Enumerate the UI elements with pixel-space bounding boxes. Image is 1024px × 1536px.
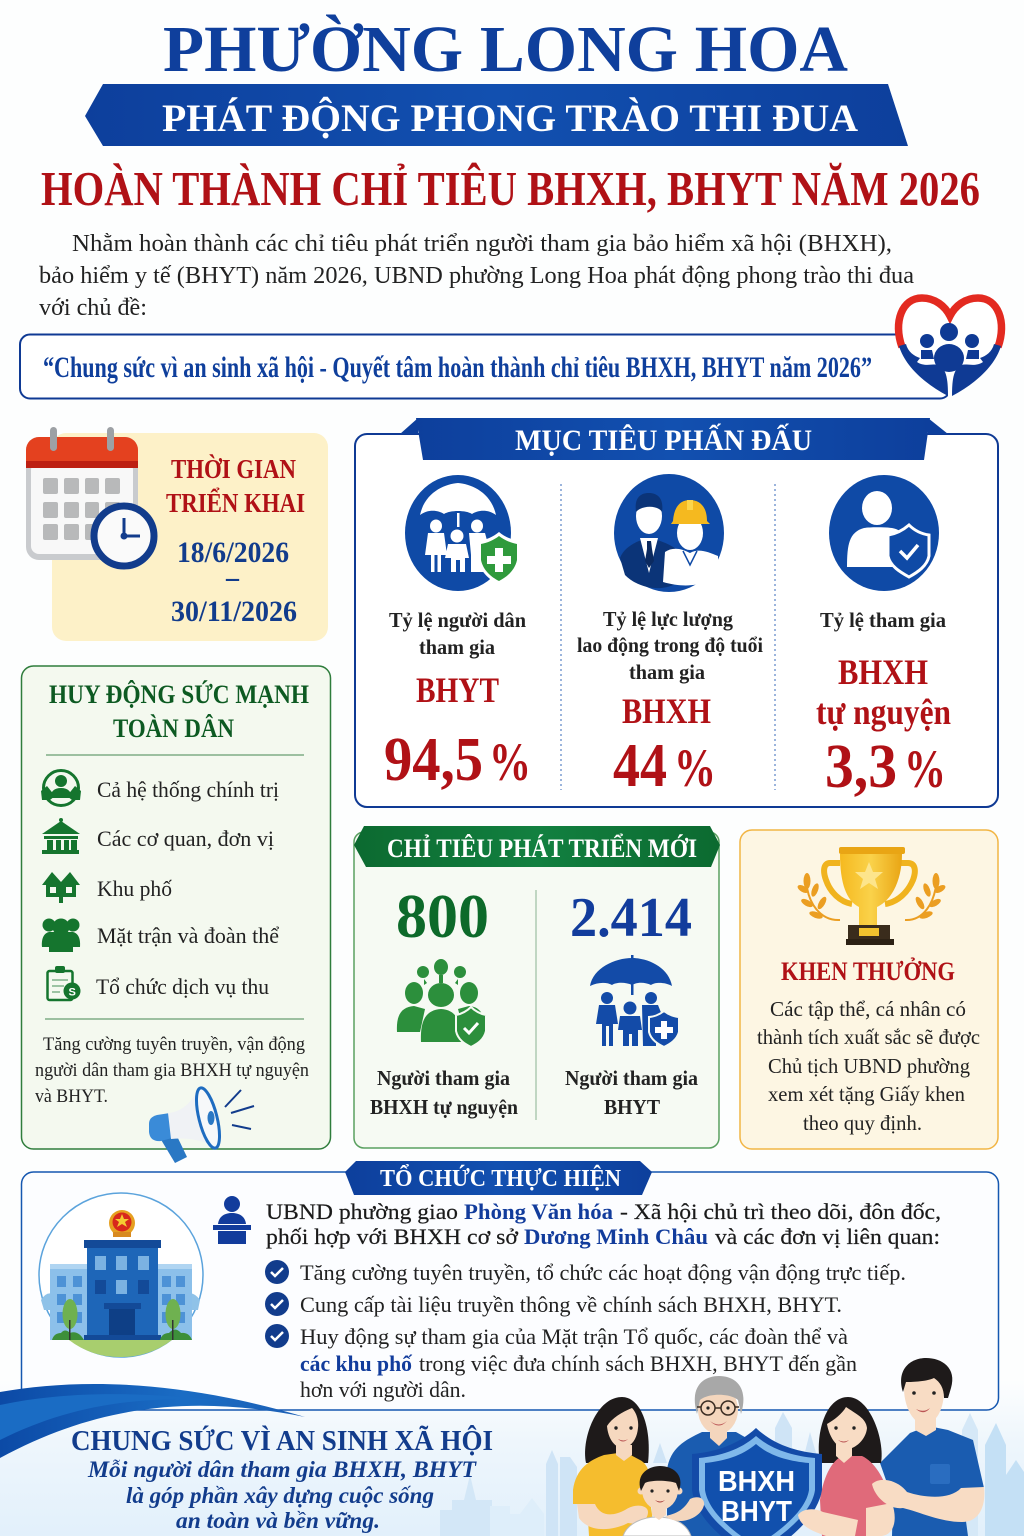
number: 2.414: 2.414: [570, 887, 692, 949]
number: 3,3%: [825, 733, 946, 801]
icon: office worker and engineer: [614, 474, 724, 592]
man's arm on shoulder: [872, 1480, 984, 1522]
text block: khen thưởng: Chủ tịch UBND phường: [768, 1054, 970, 1078]
panel: huy động sức mạnh toàn dân: [22, 666, 330, 1163]
heading: thời gian triển khai: THỜI GIAN: [171, 454, 296, 484]
list of tasks: [265, 1260, 906, 1402]
ribbon: mục tiêu phấn đấu: [400, 418, 948, 460]
panel: chỉ tiêu phát triển mới: [354, 826, 720, 1148]
heading: BHXH tự nguyện: BHXH: [838, 652, 928, 692]
panel: mục tiêu phấn đấu: [355, 418, 998, 807]
label: BHXH tự nguyện: [370, 1095, 518, 1119]
icon: blue family under umbrella: [590, 955, 679, 1047]
icon: heart with hands and people: [896, 294, 1005, 397]
icon: person with check shield: [829, 475, 939, 591]
ribbon: mục tiêu phấn đấu: MỤC TIÊU PHẤN ĐẤU: [515, 423, 812, 457]
text block: khen thưởng: xem xét tặng Giấy khen: [768, 1082, 965, 1106]
ribbon: chỉ tiêu phát triển mới: CHỈ TIÊU PHÁT TRIỂN MỚI: [387, 834, 697, 863]
text block: phân công: UBND phường giao: [266, 1199, 458, 1224]
text block: tuyên truyền: và BHYT.: [35, 1086, 108, 1107]
panel: tổ chức thực hiện: [22, 1161, 998, 1410]
boy: [623, 1466, 691, 1536]
text block: phân công: phối hợp với BHXH cơ sở: [266, 1224, 518, 1249]
heading: khen thưởng: KHEN THƯỞNG: [781, 957, 955, 986]
number: 3,3%: %: [904, 739, 946, 799]
intro text: với chủ đề:: [39, 295, 147, 321]
label: [565, 1066, 698, 1119]
text block: phân công: Phòng Văn hóa: [464, 1199, 613, 1224]
ribbon: tổ chức thực hiện: [345, 1161, 652, 1195]
task 1: Tăng cường tuyên truyền, tổ chức các hoạt động vận động trực tiếp.: [300, 1260, 906, 1285]
column 2: BHXH 44%: [577, 474, 763, 800]
icon: check 1: [265, 1260, 289, 1284]
label: BHYT: [604, 1095, 660, 1119]
icon: clipboard with coin: [48, 966, 80, 1000]
illustration: family holding shield: [573, 1358, 984, 1536]
item: Tổ chức dịch vụ thu: [96, 974, 269, 999]
text block: phân công: [266, 1199, 941, 1249]
heading: BHXH tự nguyện: [816, 652, 951, 732]
icon: government building: [42, 818, 80, 854]
column 1: BHYT 94,5%: [384, 475, 531, 794]
heading: BHXH: BHXH: [622, 691, 711, 731]
text block: khen thưởng: thành tích xuất sắc sẽ được: [757, 1025, 980, 1049]
heading: thời gian triển khai: [166, 454, 305, 518]
icon: political system: [41, 770, 81, 806]
item: Mặt trận và đoàn thể: [97, 923, 279, 948]
footer slogan: là góp phần xây dựng cuộc sống: [126, 1483, 434, 1508]
label: tham gia: [419, 635, 495, 659]
icon: government building: [39, 1193, 203, 1357]
text block: phân công: - Xã hội chủ trì theo dõi, đôn đốc,: [620, 1199, 941, 1224]
icon: houses: [42, 872, 80, 903]
text block: phân công: Dương Minh Châu: [524, 1224, 708, 1249]
icon: check 2: [265, 1292, 289, 1316]
item: Cả hệ thống chính trị: [97, 777, 279, 802]
footer slogan: [71, 1426, 493, 1533]
task 3: [300, 1324, 857, 1402]
icon: calendar with clock: [26, 427, 154, 566]
heading: thời gian triển khai: TRIỂN KHAI: [166, 487, 305, 518]
label: Tỷ lệ lực lượng: [603, 607, 733, 631]
number: 800: 800: [396, 883, 489, 951]
heading: huy động: [49, 680, 309, 743]
label: Tỷ lệ người dân: [389, 608, 526, 632]
footer slogan: CHUNG SỨC VÌ AN SINH XÃ HỘI: [71, 1426, 493, 1457]
footer slogan: Mỗi người dân tham gia BHXH, BHYT: [87, 1457, 477, 1482]
title: PHƯỜNG LONG HOA: [163, 13, 848, 86]
label: lao động trong độ tuổi: [577, 633, 763, 657]
shield: BHXH BHYT: BHXH: [718, 1466, 795, 1498]
column 3: BHXH tự nguyện 3,3%: [816, 475, 951, 801]
grandfather's hand: [665, 1497, 704, 1521]
dates: –: [225, 561, 240, 594]
icon: family under umbrella with green shield: [405, 475, 520, 591]
icon: speaker at podium: [213, 1196, 251, 1244]
text block: khen thưởng: theo quy định.: [803, 1111, 922, 1135]
ribbon: chỉ tiêu phát triển mới: [354, 826, 720, 867]
banner: phát động phong trào thi đua: PHÁT ĐỘNG PHONG TRÀO THI ĐUA: [162, 95, 858, 140]
item: Các cơ quan, đơn vị: [97, 826, 274, 851]
icon: check 3: [265, 1324, 289, 1348]
heading: BHXH tự nguyện: tự nguyện: [816, 692, 951, 732]
label: Người tham gia: [565, 1066, 698, 1090]
text block: phân công: và các đơn vị liên quan:: [715, 1224, 940, 1249]
icon: clipboard with coin: S: [68, 986, 76, 998]
heading: huy động: HUY ĐỘNG SỨC MẠNH: [49, 680, 309, 709]
heading: BHYT: BHYT: [416, 670, 499, 710]
number: 94,5%: 94,5: [384, 726, 483, 794]
dates: 18/6/2026: [177, 536, 289, 569]
label: tham gia: [629, 660, 705, 684]
number: 44%: 44: [613, 732, 667, 800]
woman's hand on shield: [798, 1509, 858, 1536]
text block: tuyên truyền: Tăng cường tuyên truyền, vận động: [43, 1034, 305, 1055]
woman in yellow: [573, 1397, 655, 1536]
footer slogan: an toàn và bền vững.: [176, 1508, 380, 1533]
man in blue: [880, 1358, 984, 1536]
panel: thời gian triển khai: [26, 427, 328, 641]
footer swoosh: [0, 1384, 305, 1458]
quote box: [20, 334, 950, 398]
text block: tuyên truyền: [35, 1034, 309, 1107]
panel: khen thưởng: [740, 830, 998, 1149]
task 3: Huy động sự tham gia của Mặt trận Tổ quốc, các đoàn thể và: [300, 1324, 848, 1349]
grandfather: [667, 1376, 772, 1536]
label: [389, 608, 526, 659]
label: [370, 1066, 518, 1119]
dates: [171, 536, 297, 628]
ribbon: tổ chức thực hiện: TỔ CHỨC THỰC HIỆN: [380, 1165, 622, 1192]
intro text: [39, 231, 914, 321]
task 3: các khu phố: [300, 1351, 413, 1376]
task 2: Cung cấp tài liệu truyền thông về chính sách BHXH, BHYT.: [300, 1292, 842, 1317]
number: 94,5%: %: [489, 732, 531, 792]
icon: green group with shield: [397, 959, 486, 1047]
number: 44%: %: [674, 738, 716, 798]
label: Tỷ lệ tham gia: [820, 608, 946, 632]
text block: khen thưởng: [757, 997, 980, 1135]
woman in pink: [819, 1397, 895, 1536]
text block: khen thưởng: Các tập thể, cá nhân có: [770, 997, 966, 1021]
shield: BHXH BHYT: [692, 1428, 822, 1536]
label: Người tham gia: [377, 1066, 510, 1090]
text block: tuyên truyền: người dân tham gia BHXH tự nguyện: [35, 1060, 309, 1081]
shield: BHXH BHYT: BHYT: [721, 1496, 792, 1528]
task 3: trong việc đưa chính sách BHXH, BHYT đến gần: [419, 1351, 857, 1376]
number: 3,3%: 3,3: [825, 733, 897, 801]
skyline: [440, 1412, 1024, 1536]
icon: trophy: [796, 847, 947, 945]
number: 44%: [613, 732, 716, 800]
dates: 30/11/2026: [171, 595, 297, 628]
heading: huy động: TOÀN DÂN: [113, 714, 234, 743]
label: [577, 607, 763, 684]
item: Khu phố: [97, 876, 172, 901]
intro text: Nhằm hoàn thành các chỉ tiêu phát triển người tham gia bảo hiểm xã hội (BHXH),: [72, 231, 892, 257]
intro text: bảo hiểm y tế (BHYT) năm 2026, UBND phường Long Hoa phát động phong trào thi đua: [39, 263, 914, 289]
icon: megaphone: [149, 1086, 254, 1163]
icon: group of people: [42, 918, 80, 952]
banner: phát động phong trào thi đua: [85, 84, 908, 146]
task 3: hơn với người dân.: [300, 1377, 466, 1402]
